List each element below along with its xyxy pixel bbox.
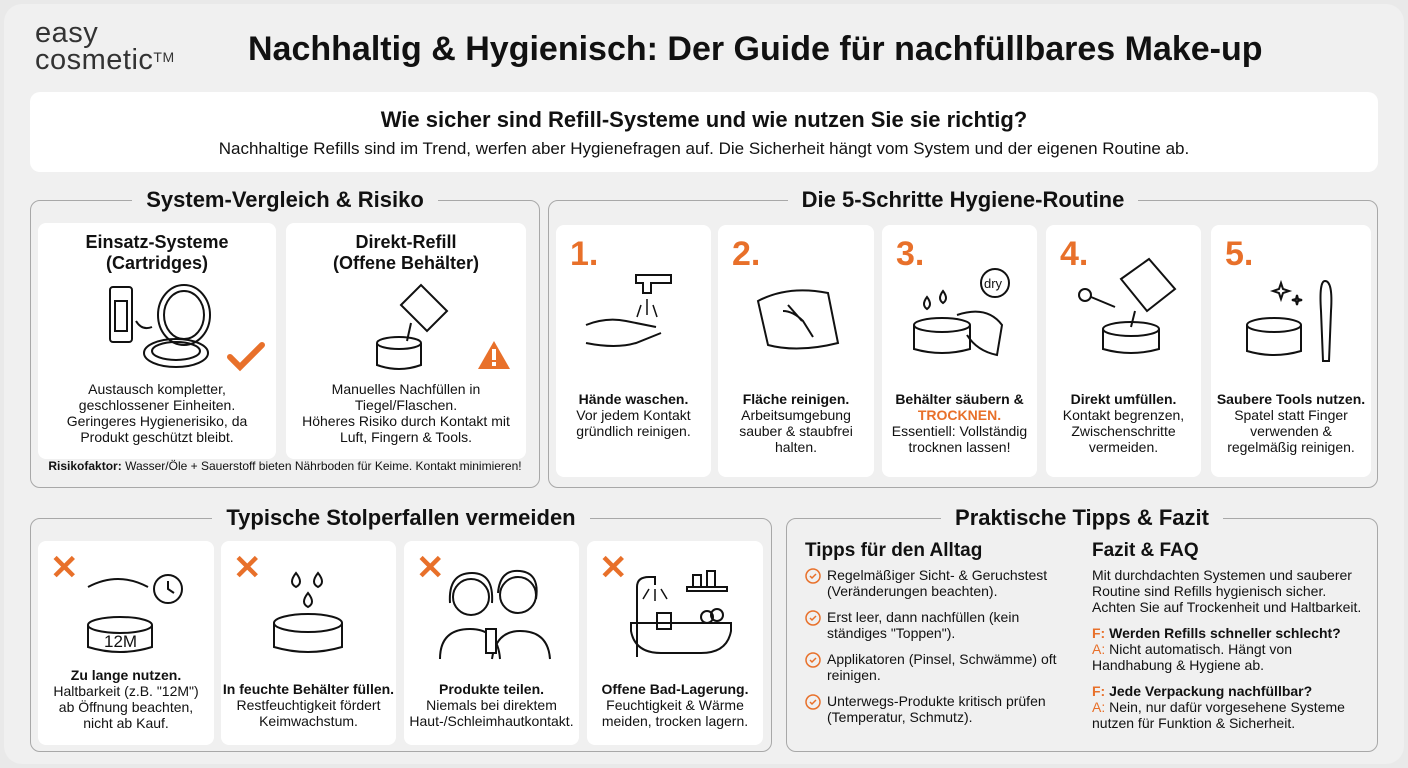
pitfall 1 [38,541,214,745]
step 3: 3. [896,235,924,273]
step 2: Fläche reinigen. [743,391,849,407]
pitfall 2: In feuchte Behälter füllen. [223,681,394,697]
step 3: TROCKNEN. [918,407,1001,423]
FAQ: F: Werden Refills schneller schlecht? [1092,625,1341,641]
risk note: Risikofaktor: Wasser/Öle + Sauerstoff bieten Nährboden für Keime. Kontakt minimieren! [48,459,522,473]
card: cartridges: (Cartridges) [106,253,208,273]
step 1: gründlich reinigen. [576,423,691,439]
logo: easy [35,17,98,49]
pitfall 3: Niemals bei direktem [426,697,557,713]
pitfall 4: Feuchtigkeit & Wärme [606,697,744,713]
tips list: Applikatoren (Pinsel, Schwämme) oft reinigen. [827,651,1057,683]
card: direct refill: Tiegel/Flaschen. [355,397,457,413]
step 2: 2. [732,235,760,273]
pitfall 2: Keimwachstum. [259,713,358,729]
step 4: Kontakt begrenzen, [1063,407,1184,423]
step 5: regelmäßig reinigen. [1227,439,1355,455]
logo [35,17,175,76]
tips list [805,540,1057,725]
step 5: verwenden & [1250,423,1332,439]
intro box: Wie sicher sind Refill-Systeme und wie nutzen Sie sie richtig? [381,107,1027,132]
pitfall 4: Offene Bad-Lagerung. [601,681,748,697]
step 3: Behälter säubern & [895,391,1024,407]
step 1: 1. [570,235,598,273]
text: Die 5-Schritte Hygiene-Routine [802,187,1124,212]
pitfall 1: ✕ [50,549,78,587]
step 2: halten. [775,439,817,455]
card: direct refill: (Offene Behälter) [333,253,479,273]
step 3: trocknen lassen! [909,439,1010,455]
text: Typische Stolperfallen vermeiden [226,505,576,530]
pitfall 4: meiden, trocken lagern. [602,713,748,729]
pitfall 1: Haltbarkeit (z.B. "12M") [53,683,199,699]
card: cartridges: Geringeres Hygienerisiko, da [67,413,247,429]
panel: 5 steps [548,200,1378,488]
card: cartridges [38,223,276,459]
card: direct refill: Manuelles Nachfüllen in [332,381,480,397]
pitfall 4: ✕ [599,549,628,587]
icon: cartridge and compact [109,284,211,368]
tips list: Unterwegs-Produkte kritisch prüfen (Temperatur, Schmutz). [827,693,1046,725]
FAQ: Fazit & FAQ [1092,540,1199,561]
step 5 [1211,225,1371,477]
step 5: 5. [1225,235,1253,273]
pitfall 3: Produkte teilen. [439,681,544,697]
tips list: Regelmäßiger Sicht- & Geruchstest (Veränderungen beachten). [827,567,1047,599]
FAQ: A: Nicht automatisch. Hängt von Handhabung & Hygiene ab. [1092,641,1292,673]
pitfall 2: ✕ [233,549,262,587]
pitfall 3: ✕ [416,549,444,587]
pitfall 1: Zu lange nutzen. [71,667,181,683]
step 1 [556,225,711,477]
tips list: Erst leer, dann nachfüllen (kein ständiges "Toppen"). [827,609,1019,641]
step 5: Spatel statt Finger [1234,407,1348,423]
text: System-Vergleich & Risiko [146,187,424,212]
card: direct refill: Direkt-Refill [355,232,457,252]
logo: cosmeticTM [35,44,175,76]
pitfall 1: ab Öffnung beachten, [59,699,193,715]
pitfall 1: nicht ab Kauf. [83,715,169,731]
pitfall 1: 12M [104,632,137,651]
intro box [30,92,1378,172]
pitfall 2: Restfeuchtigkeit fördert [237,697,380,713]
step 4: Direkt umfüllen. [1071,391,1176,407]
pitfall 4 [587,541,763,745]
pitfall 2 [221,541,396,745]
icon: warning [478,341,510,369]
panel: pitfalls [30,518,772,752]
icon: check [227,342,265,372]
step 4: Zwischenschritte [1071,423,1176,439]
card: direct refill: Höheres Risiko durch Kontakt mit [302,413,510,429]
step 4: 4. [1060,235,1088,273]
step 2: sauber & staubfrei [739,423,853,439]
step 4: vermeiden. [1089,439,1158,455]
FAQ: F: Jede Verpackung nachfüllbar? [1092,683,1312,699]
tips list: Tipps für den Alltag [805,540,982,561]
step 1: Hände waschen. [579,391,688,407]
FAQ: Mit durchdachten Systemen und sauberer Routine sind Refills hygienisch sicher. Achten Sie auf Trockenheit und Haltbarkeit. [1092,567,1361,615]
icon: pouch pouring into jar [376,284,448,370]
card: direct refill [286,223,526,459]
step 3 [882,225,1037,477]
title: Nachhaltig & Hygienisch: Der Guide für nachfüllbares Make-up [248,30,1263,68]
pitfall 3: Haut-/Schleimhautkontakt. [409,713,574,729]
card: direct refill: Luft, Fingern & Tools. [340,429,472,445]
panel: system comparison [30,200,540,488]
text: Praktische Tipps & Fazit [955,505,1209,530]
step 3: dry [984,276,1003,291]
FAQ: A: Nein, nur dafür vorgesehene Systeme nutzen für Funktion & Sicherheit. [1092,699,1345,731]
pitfall 3 [404,541,579,745]
FAQ [1092,540,1361,731]
step 4 [1046,225,1201,477]
card: cartridges: geschlossener Einheiten. [79,397,235,413]
intro box: Nachhaltige Refills sind im Trend, werfen aber Hygienefragen auf. Die Sicherheit hängt vom System und der eigenen Routine ab. [219,139,1189,158]
step 5: Saubere Tools nutzen. [1217,391,1365,407]
card: cartridges: Austausch kompletter, [88,381,226,397]
step 2 [718,225,874,477]
step 2: Arbeitsumgebung [741,407,851,423]
step 3: Essentiell: Vollständig [892,423,1027,439]
card: cartridges: Produkt geschützt bleibt. [80,429,234,445]
panel: tips & conclusion [786,518,1378,752]
step 1: Vor jedem Kontakt [576,407,691,423]
card: cartridges: Einsatz-Systeme [85,232,229,252]
